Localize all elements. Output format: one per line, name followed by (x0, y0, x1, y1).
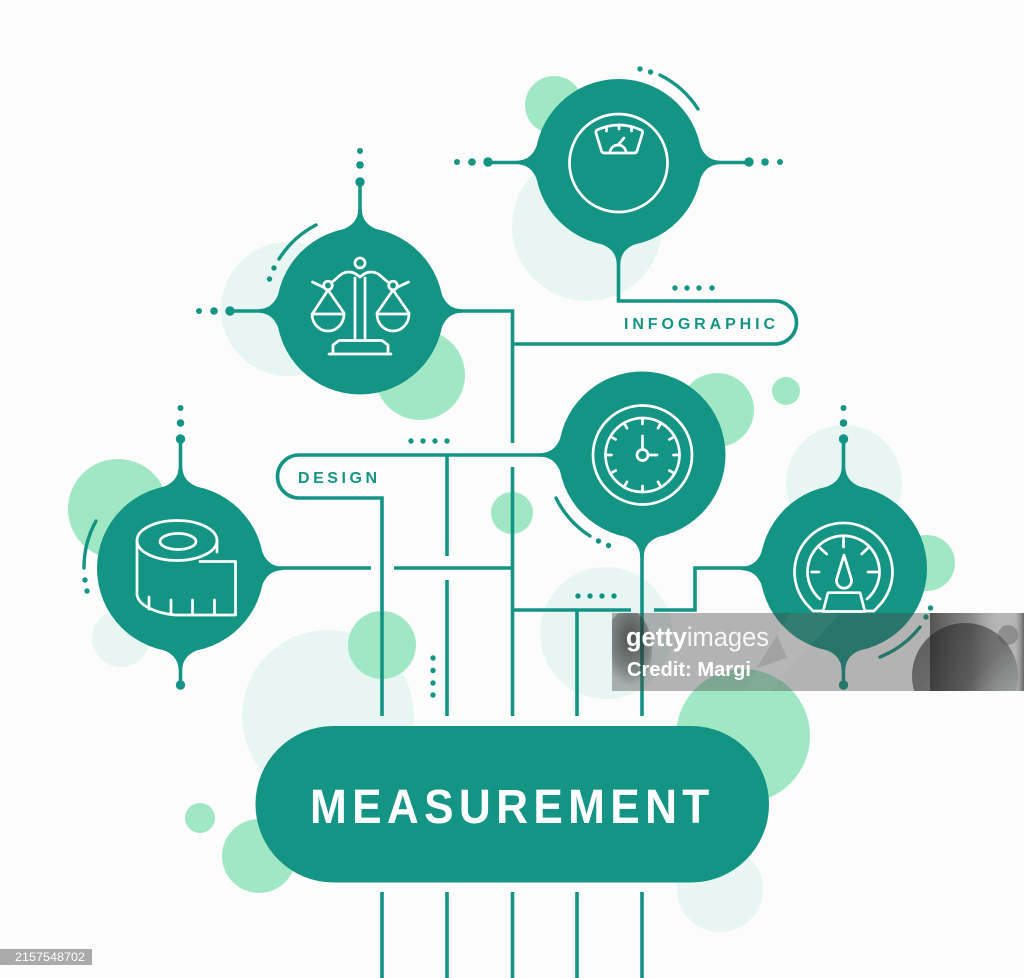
watermark logo text: gettyimages (626, 622, 769, 652)
icon: gauge (794, 523, 892, 612)
node: weighing scale (454, 66, 783, 264)
image id tag (0, 949, 92, 965)
small dot rows (408, 285, 715, 698)
image id text: 2157548702 (15, 952, 85, 964)
label: infographic: INFOGRAPHIC (624, 316, 775, 333)
node: speedometer (742, 405, 933, 690)
label: design: DESIGN (298, 470, 377, 487)
node: clock (540, 372, 726, 557)
watermark credit text: Credit: Margi (627, 659, 751, 681)
connector lines (263, 245, 796, 978)
icon: balance (312, 258, 409, 354)
node: balance scales (196, 148, 462, 394)
watermark banner (612, 613, 1024, 691)
icon: clock face (593, 406, 692, 504)
title pill: measurement (256, 726, 769, 882)
icon: measuring tape (137, 520, 236, 615)
decorative background circles (68, 76, 955, 932)
node: tape measure (82, 405, 282, 690)
title text: MEASUREMENT (310, 779, 709, 833)
icon: bathroom scale (570, 114, 668, 212)
